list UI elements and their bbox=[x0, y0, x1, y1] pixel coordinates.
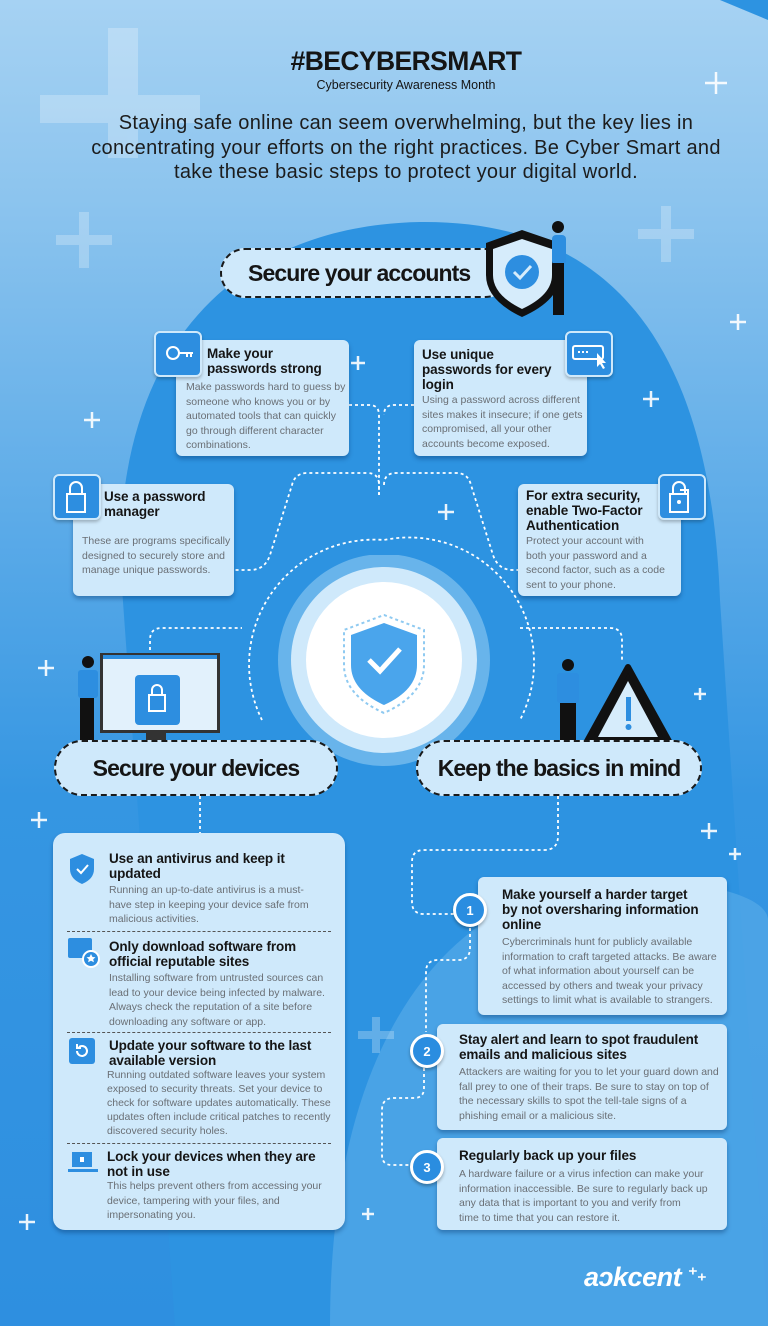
intro text: concentrating your efforts on the right practices. Be Cyber Smart and bbox=[91, 136, 721, 158]
tip: update software: exposed to security threats. Set your device to bbox=[107, 1083, 322, 1095]
tip: update software: discovered security holes. bbox=[107, 1125, 228, 1137]
card: unique passwords bbox=[414, 340, 587, 456]
title bbox=[291, 46, 522, 92]
illustration: man with warning sign bbox=[560, 659, 672, 740]
illustration: shield and woman bbox=[486, 221, 566, 317]
card: password manager: manage unique passwords. bbox=[82, 564, 210, 576]
card: basics 2 bbox=[437, 1024, 727, 1130]
card: two-factor: both your password and a bbox=[526, 550, 647, 562]
icon: key bbox=[154, 331, 202, 377]
card: two-factor bbox=[518, 484, 681, 596]
card: basics 2: phishing email or a malicious site. bbox=[459, 1110, 616, 1122]
card: basics 1: by not oversharing information bbox=[502, 902, 699, 917]
card: basics 2: fall prey to one of their traps. Be sure to stay on top of bbox=[459, 1081, 709, 1093]
card: password manager: These are programs specifically bbox=[82, 535, 230, 547]
card: two-factor: sent to your phone. bbox=[526, 579, 616, 591]
card: basics 1: Cybercriminals hunt for publicly available bbox=[502, 936, 692, 948]
heading: secure your devices: Secure your devices bbox=[93, 754, 299, 780]
tip: antivirus bbox=[70, 851, 309, 925]
card: basics 1: settings to limit what is available to strangers. bbox=[502, 994, 713, 1006]
card: basics 3: any data that is important to you and verify from bbox=[459, 1197, 681, 1209]
icon: padlock bbox=[53, 474, 101, 520]
card: password manager bbox=[73, 484, 234, 596]
intro text bbox=[91, 112, 721, 183]
card: strong passwords: automated tools that can quickly bbox=[186, 410, 336, 422]
title: #BECYBERSMART bbox=[291, 46, 521, 76]
dashed connectors bbox=[150, 405, 622, 1165]
number 1: 1 bbox=[466, 902, 474, 918]
heading: secure your accounts: Secure your accounts bbox=[248, 260, 470, 286]
tip: lock devices bbox=[68, 1149, 322, 1221]
intro text: take these basic steps to protect your digital world. bbox=[174, 161, 638, 183]
number 2: 2 bbox=[423, 1044, 431, 1058]
tip: official software: Installing software from untrusted sources can bbox=[109, 972, 323, 984]
tip: antivirus: Use an antivirus and keep it bbox=[109, 851, 285, 866]
card: basics 1: Make yourself a harder target bbox=[502, 887, 687, 902]
card: unique passwords: passwords for every bbox=[422, 362, 551, 377]
card: password manager: Use a password bbox=[104, 489, 205, 504]
heading: secure your devices bbox=[54, 740, 338, 796]
card: unique passwords: accounts become exposed. bbox=[422, 438, 550, 450]
tip: official software bbox=[68, 938, 325, 1028]
tip: official software: lead to your device being infected by malware. bbox=[109, 987, 325, 999]
heading: secure your accounts bbox=[220, 248, 510, 298]
card: two-factor: enable Two-Factor bbox=[526, 503, 643, 518]
card: basics 3 bbox=[437, 1138, 727, 1230]
heading: keep the basics in mind bbox=[416, 740, 702, 796]
card: basics 3: A hardware failure or a virus infection can make your bbox=[459, 1168, 704, 1180]
card: basics 1 bbox=[478, 877, 727, 1015]
tip: lock devices: device, tampering with your files, and bbox=[107, 1195, 280, 1207]
number 2 bbox=[410, 1034, 444, 1068]
card: two-factor: second factor, such as a code bbox=[526, 564, 665, 576]
card: basics 3: time to time that you can restore it. bbox=[459, 1212, 620, 1224]
tip: official software: downloading any software or app. bbox=[109, 1016, 266, 1028]
card: strong passwords: combinations. bbox=[186, 439, 251, 451]
card: strong passwords: Make your bbox=[207, 346, 273, 361]
intro text: Staying safe online can seem overwhelming, but the key lies in bbox=[119, 112, 693, 134]
card: strong passwords: Make passwords hard to guess by bbox=[186, 381, 345, 393]
card: basics 3: Regularly back up your files bbox=[459, 1148, 636, 1163]
card: unique passwords: login bbox=[422, 377, 454, 392]
card: unique passwords: Using a password across different bbox=[422, 394, 580, 406]
card: basics 1: information to craft targeted attacks. Be aware bbox=[502, 951, 717, 963]
card: basics 2: the necessary skills to spot the tell-tale signs of a bbox=[459, 1095, 687, 1107]
card: unique passwords: Use unique bbox=[422, 347, 494, 362]
tip: official software: Always check the reputation of a site before bbox=[109, 1001, 312, 1013]
card: basics 2: emails and malicious sites bbox=[459, 1047, 627, 1062]
icon: double lock bbox=[658, 474, 706, 520]
tip: update software: check for software updates automatically. These bbox=[107, 1097, 331, 1109]
card: two-factor: Authentication bbox=[526, 518, 619, 533]
card: strong passwords: go through different character bbox=[186, 425, 324, 437]
card: strong passwords bbox=[176, 340, 349, 456]
tip: update software: updates often include critical patches to recently bbox=[107, 1111, 331, 1123]
card: two-factor: For extra security, bbox=[526, 488, 640, 503]
card: password manager: designed to securely store and bbox=[82, 550, 225, 562]
number 1 bbox=[453, 893, 487, 927]
icon: password field bbox=[565, 331, 613, 377]
tip: update software: Running outdated software leaves your system bbox=[107, 1069, 325, 1081]
tip: antivirus: have step in keeping your device safe from bbox=[109, 899, 309, 911]
card: two-factor: Protect your account with bbox=[526, 535, 644, 547]
card: basics 2: Stay alert and learn to spot fraudulent bbox=[459, 1032, 698, 1047]
title: Cybersecurity Awareness Month bbox=[316, 78, 496, 92]
center shield emblem bbox=[278, 555, 490, 766]
card: basics 1: online bbox=[502, 917, 541, 932]
tip: official software: official reputable sites bbox=[109, 954, 249, 969]
tip: antivirus: malicious activities. bbox=[109, 913, 199, 925]
tip: official software: Only download software from bbox=[109, 939, 296, 954]
tip: antivirus: Running an up-to-date antivirus is a must- bbox=[109, 884, 304, 896]
tip: lock devices: Lock your devices when they are bbox=[107, 1149, 315, 1164]
card: unique passwords: sites makes it insecure; if one gets bbox=[422, 409, 582, 421]
card: password manager: manager bbox=[104, 504, 160, 519]
illustration: man with monitor bbox=[78, 653, 220, 740]
card: basics 1: accessed by others and tweak your privacy bbox=[502, 980, 703, 992]
tip: lock devices: impersonating you. bbox=[107, 1209, 196, 1221]
tip: antivirus: updated bbox=[109, 866, 161, 881]
panel: device tips bbox=[53, 833, 345, 1230]
tip: lock devices: This helps prevent others from accessing your bbox=[107, 1180, 322, 1192]
card: basics 3: information inaccessible. Be sure to regularly back up bbox=[459, 1183, 708, 1195]
card: basics 1: of what information about yourself can be bbox=[502, 965, 694, 977]
card: strong passwords: passwords strong bbox=[207, 361, 322, 376]
heading: keep the basics in mind: Keep the basics in mind bbox=[438, 754, 680, 780]
number 3 bbox=[410, 1150, 444, 1184]
tip: update software: Update your software to the last bbox=[109, 1038, 311, 1053]
card: strong passwords: someone who knows you or by bbox=[186, 396, 330, 408]
card: basics 2: Attackers are waiting for you to let your guard down and bbox=[459, 1066, 719, 1078]
tip: update software bbox=[69, 1038, 331, 1137]
tip: lock devices: not in use bbox=[107, 1164, 170, 1179]
tip: update software: available version bbox=[109, 1053, 216, 1068]
card: unique passwords: compromised, all your other bbox=[422, 423, 552, 435]
logo: ackcent: aɔkcent ⁺₊ bbox=[584, 1262, 706, 1292]
number 3: 3 bbox=[423, 1160, 431, 1174]
